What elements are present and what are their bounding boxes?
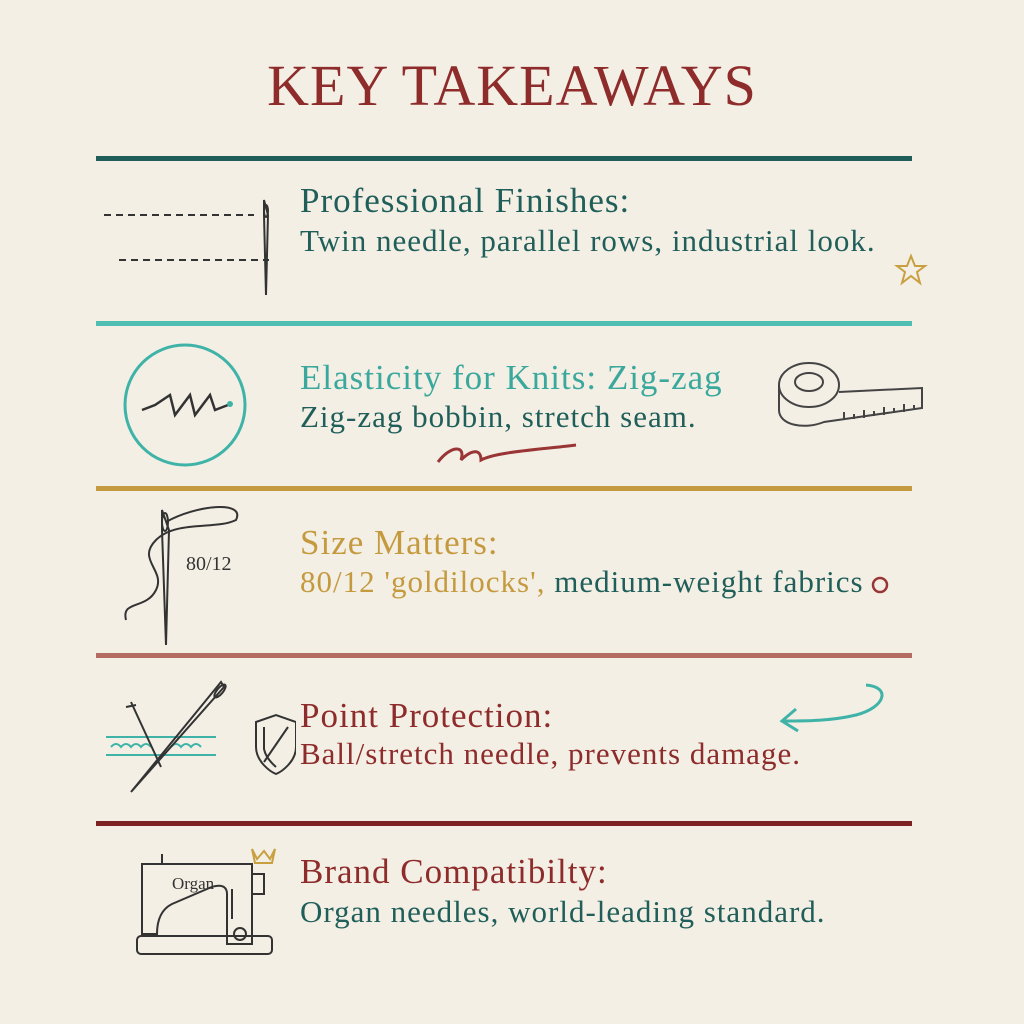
icon: tape measure <box>778 362 923 427</box>
panel: point protection <box>106 680 884 793</box>
icon: zig-zag circle <box>124 344 246 466</box>
label Organ: Organ <box>172 874 214 893</box>
body text: Twin needle, parallel rows, industrial look. <box>300 223 876 258</box>
body text: Organ needles, world-leading standard. <box>300 894 826 929</box>
icon: twin needle stitches <box>104 200 269 295</box>
icon: sewing machine <box>136 848 276 955</box>
body text: 80/12 'goldilocks', medium-weight fabrics <box>300 564 864 599</box>
title: KEY TAKEAWAYS <box>267 53 757 118</box>
arrow <box>780 684 884 732</box>
icon: needles on fabric with shield <box>106 680 296 793</box>
heading: Professional Finishes: <box>300 181 630 220</box>
squiggle <box>436 444 576 463</box>
circle dot <box>872 576 888 594</box>
heading: Size Matters: <box>300 523 499 562</box>
heading: Brand Compatibilty: <box>300 852 608 891</box>
heading: Point Protection: <box>300 696 553 735</box>
panel: elasticity for knits <box>124 344 923 466</box>
icon: threaded needle 80/12 <box>124 506 238 645</box>
panel: professional finishes <box>104 181 928 295</box>
panel: size matters <box>124 506 888 645</box>
body text: Ball/stretch needle, prevents damage. <box>300 736 801 771</box>
icon: star <box>894 254 928 286</box>
body text: Zig-zag bobbin, stretch seam. <box>300 399 697 434</box>
panel: brand compatibility <box>136 848 826 955</box>
label 80/12: 80/12 <box>186 553 232 575</box>
heading: Elasticity for Knits: Zig-zag <box>300 358 723 397</box>
